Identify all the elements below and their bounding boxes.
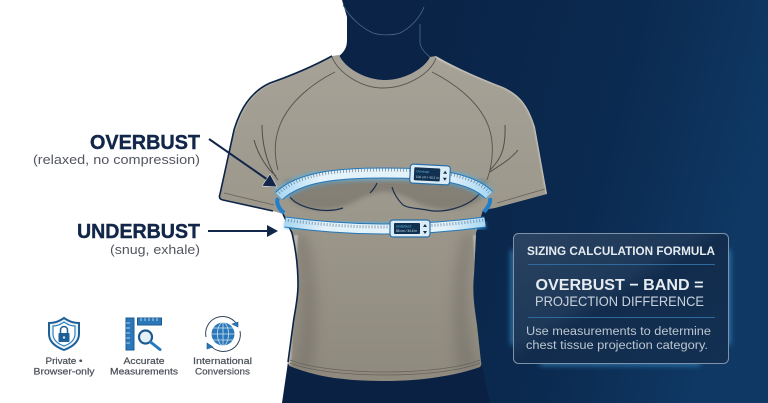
overbust heading: OVERBUST xyxy=(90,132,200,154)
lower body xyxy=(282,362,490,403)
icon: shield with lock xyxy=(49,318,79,350)
underbust heading: UNDERBUST xyxy=(77,221,200,243)
feature: accurate xyxy=(110,318,179,376)
chest contour lines xyxy=(290,183,480,211)
icon: globe with arrows xyxy=(206,317,240,351)
icon: ruler and magnifier xyxy=(126,318,162,350)
chest shadow xyxy=(285,180,488,210)
formula result: PROJECTION DIFFERENCE xyxy=(535,293,704,309)
wrinkles xyxy=(254,125,518,180)
feature: private xyxy=(34,318,95,376)
panel heading: SIZING CALCULATION FORMULA xyxy=(527,246,715,258)
panel description: Use measurements to determine xyxy=(526,326,711,338)
underbust note: (snug, exhale) xyxy=(110,242,200,257)
label: overbust xyxy=(33,132,200,167)
underbust display xyxy=(390,220,430,237)
overbust display: Overbust: xyxy=(416,169,430,174)
underbust display: 88 cm / 34.6 in xyxy=(396,229,417,233)
sleeve hems xyxy=(224,189,545,375)
panel: sizing calculation formula xyxy=(513,234,728,364)
shirt outline left xyxy=(219,56,332,362)
head and neck silhouette xyxy=(338,0,431,90)
overbust tape back wrap xyxy=(277,198,490,213)
overbust display: 102 cm / 40.2 in xyxy=(416,175,439,180)
formula: OVERBUST − BAND = xyxy=(536,277,704,294)
private caption: Private • xyxy=(46,356,82,366)
feature: private: Browser-only xyxy=(34,366,95,376)
underbust display: Underbust: xyxy=(396,224,412,228)
label: underbust xyxy=(77,221,200,257)
conversions caption: International xyxy=(193,356,252,366)
collar and raglan seams xyxy=(275,57,492,180)
feature: conversions xyxy=(193,317,252,376)
arrow: overbust xyxy=(209,139,277,187)
t-shirt xyxy=(219,55,547,381)
dark background panel xyxy=(415,0,768,403)
underbust tape xyxy=(285,220,485,229)
panel: sizing calculation formula: chest tissue projection category. xyxy=(526,340,708,352)
figure xyxy=(219,0,547,403)
overbust tape xyxy=(279,170,489,196)
side shading xyxy=(292,233,480,370)
jaw line xyxy=(343,5,430,57)
arrow: underbust xyxy=(208,225,278,237)
feature: accurate: Measurements xyxy=(110,366,179,376)
accurate caption: Accurate xyxy=(124,356,164,366)
overbust note: (relaxed, no compression) xyxy=(33,152,200,167)
light rim on shoulders xyxy=(234,57,547,194)
feature: conversions: Conversions xyxy=(195,366,251,376)
overbust display xyxy=(410,164,450,185)
